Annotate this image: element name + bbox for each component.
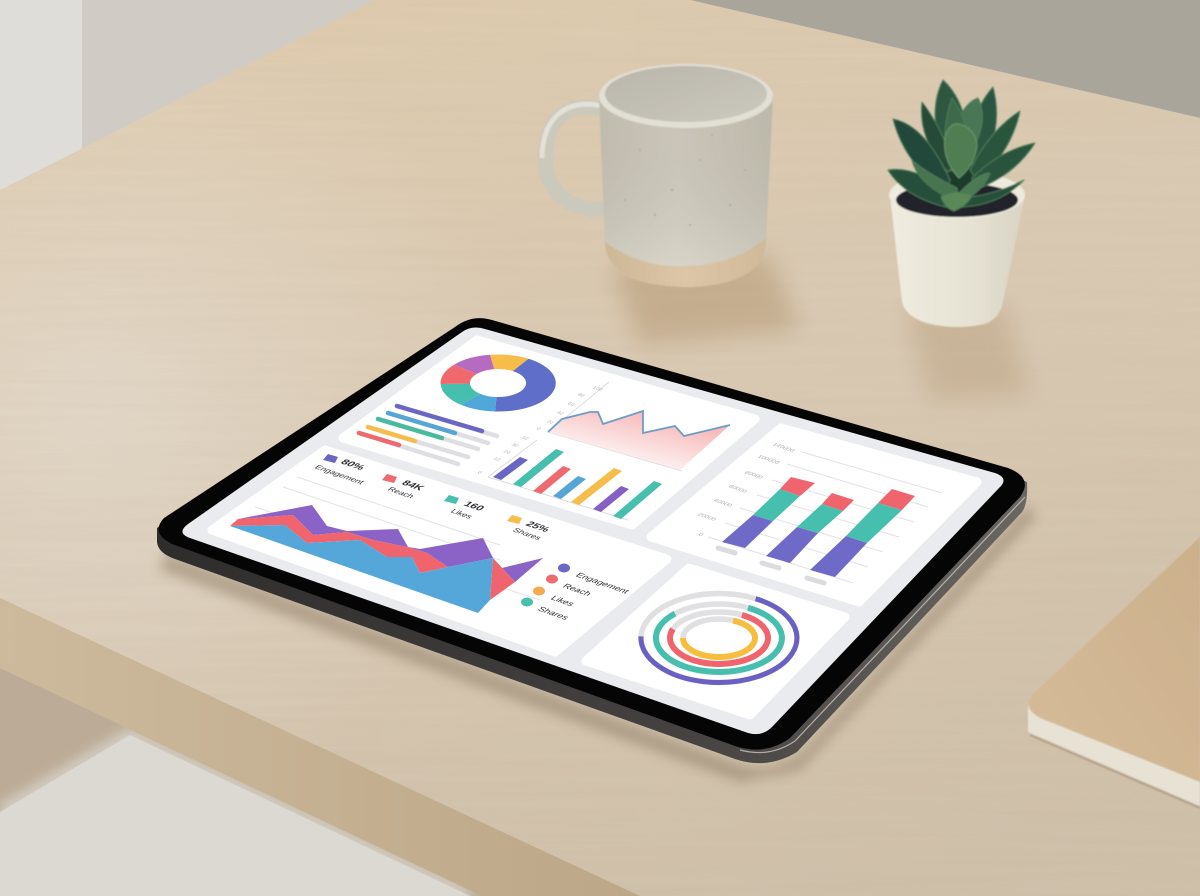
bar chart axis labels: 10	[492, 457, 502, 462]
stat: reach: Reach	[386, 485, 417, 500]
area line chart	[535, 382, 730, 471]
chart legend: Reach	[561, 582, 594, 597]
y axis labels: 140000	[771, 442, 797, 454]
stat: shares	[507, 515, 552, 541]
plant core	[931, 138, 983, 206]
chart legend: Engagement	[574, 571, 632, 595]
tablet	[157, 318, 1027, 763]
vertical bar chart	[476, 436, 662, 520]
panel: stats and stacked area chart	[212, 450, 667, 652]
stat: likes: 160	[461, 500, 486, 513]
coffee mug	[542, 64, 773, 287]
bar chart axis labels: 30	[510, 443, 520, 448]
succulent leaves	[888, 80, 1035, 211]
grid lines	[255, 477, 540, 600]
stat: reach	[382, 474, 426, 500]
stat: reach: 84K	[399, 479, 426, 493]
y axis labels: 20000	[696, 512, 718, 522]
stat: engagement: 80%	[338, 458, 367, 472]
mug clay base	[605, 238, 766, 287]
y axis labels: 80000	[743, 470, 765, 480]
stat: likes	[444, 495, 486, 520]
y axis labels: 100000	[756, 454, 782, 466]
plant pot with succulent	[888, 80, 1035, 327]
grid lines	[708, 452, 942, 583]
shadows on the desk	[160, 255, 1036, 782]
y axis labels: 60000	[727, 484, 749, 494]
bar chart axis labels: 50	[520, 436, 530, 441]
stat: shares: 25%	[523, 520, 552, 534]
stat: engagement: Engagement	[313, 463, 367, 486]
mug interior	[605, 66, 767, 122]
donut chart	[441, 355, 556, 412]
stat: engagement	[313, 454, 367, 486]
mug speckles	[624, 134, 746, 226]
panel: stacked bar chart	[651, 428, 977, 602]
tablet black bezel	[159, 318, 1025, 750]
mug rim	[599, 64, 773, 128]
mug handle	[542, 104, 606, 209]
y axis labels: 0	[697, 532, 706, 538]
bar chart axis labels	[476, 436, 530, 475]
y axis labels: 40000	[712, 498, 734, 508]
pot	[890, 195, 1025, 327]
stat: shares: Shares	[511, 526, 544, 541]
line chart axis labels: 60	[566, 402, 576, 407]
line chart axis labels: 0	[535, 427, 542, 431]
bar chart axis labels: 0	[476, 471, 483, 475]
line chart axis labels: 20	[545, 420, 555, 425]
line chart axis labels: 80	[576, 393, 586, 398]
line chart axis labels: 40	[555, 411, 565, 416]
panel: radial progress chart	[586, 568, 845, 715]
chart legend: Likes	[549, 594, 577, 608]
panel: donut, bars and trend charts	[343, 340, 755, 525]
notebook pages	[1028, 705, 1200, 806]
ring tracks	[641, 594, 797, 682]
bar chart axis labels: 20	[502, 450, 512, 455]
line chart axis labels	[535, 386, 604, 431]
notebook cover	[1028, 537, 1200, 782]
chart legend: Shares	[536, 605, 572, 621]
stacked area chart	[230, 505, 543, 613]
desk front edge	[0, 598, 640, 896]
notebook	[1028, 537, 1200, 808]
mug body	[599, 96, 773, 287]
line chart axis labels: 100	[591, 386, 604, 392]
tablet metal body	[157, 320, 1027, 763]
y axis labels	[696, 442, 797, 538]
progress bars	[359, 406, 497, 464]
tablet edge highlight	[740, 497, 1025, 753]
stat: likes: Likes	[449, 507, 475, 520]
chair below the desk	[0, 735, 470, 896]
tablet screen	[182, 328, 1004, 734]
chart legend	[521, 564, 632, 621]
soil	[896, 183, 1018, 217]
x axis label placeholders	[718, 548, 824, 583]
stacked bars	[722, 477, 915, 577]
ring values	[641, 599, 797, 682]
